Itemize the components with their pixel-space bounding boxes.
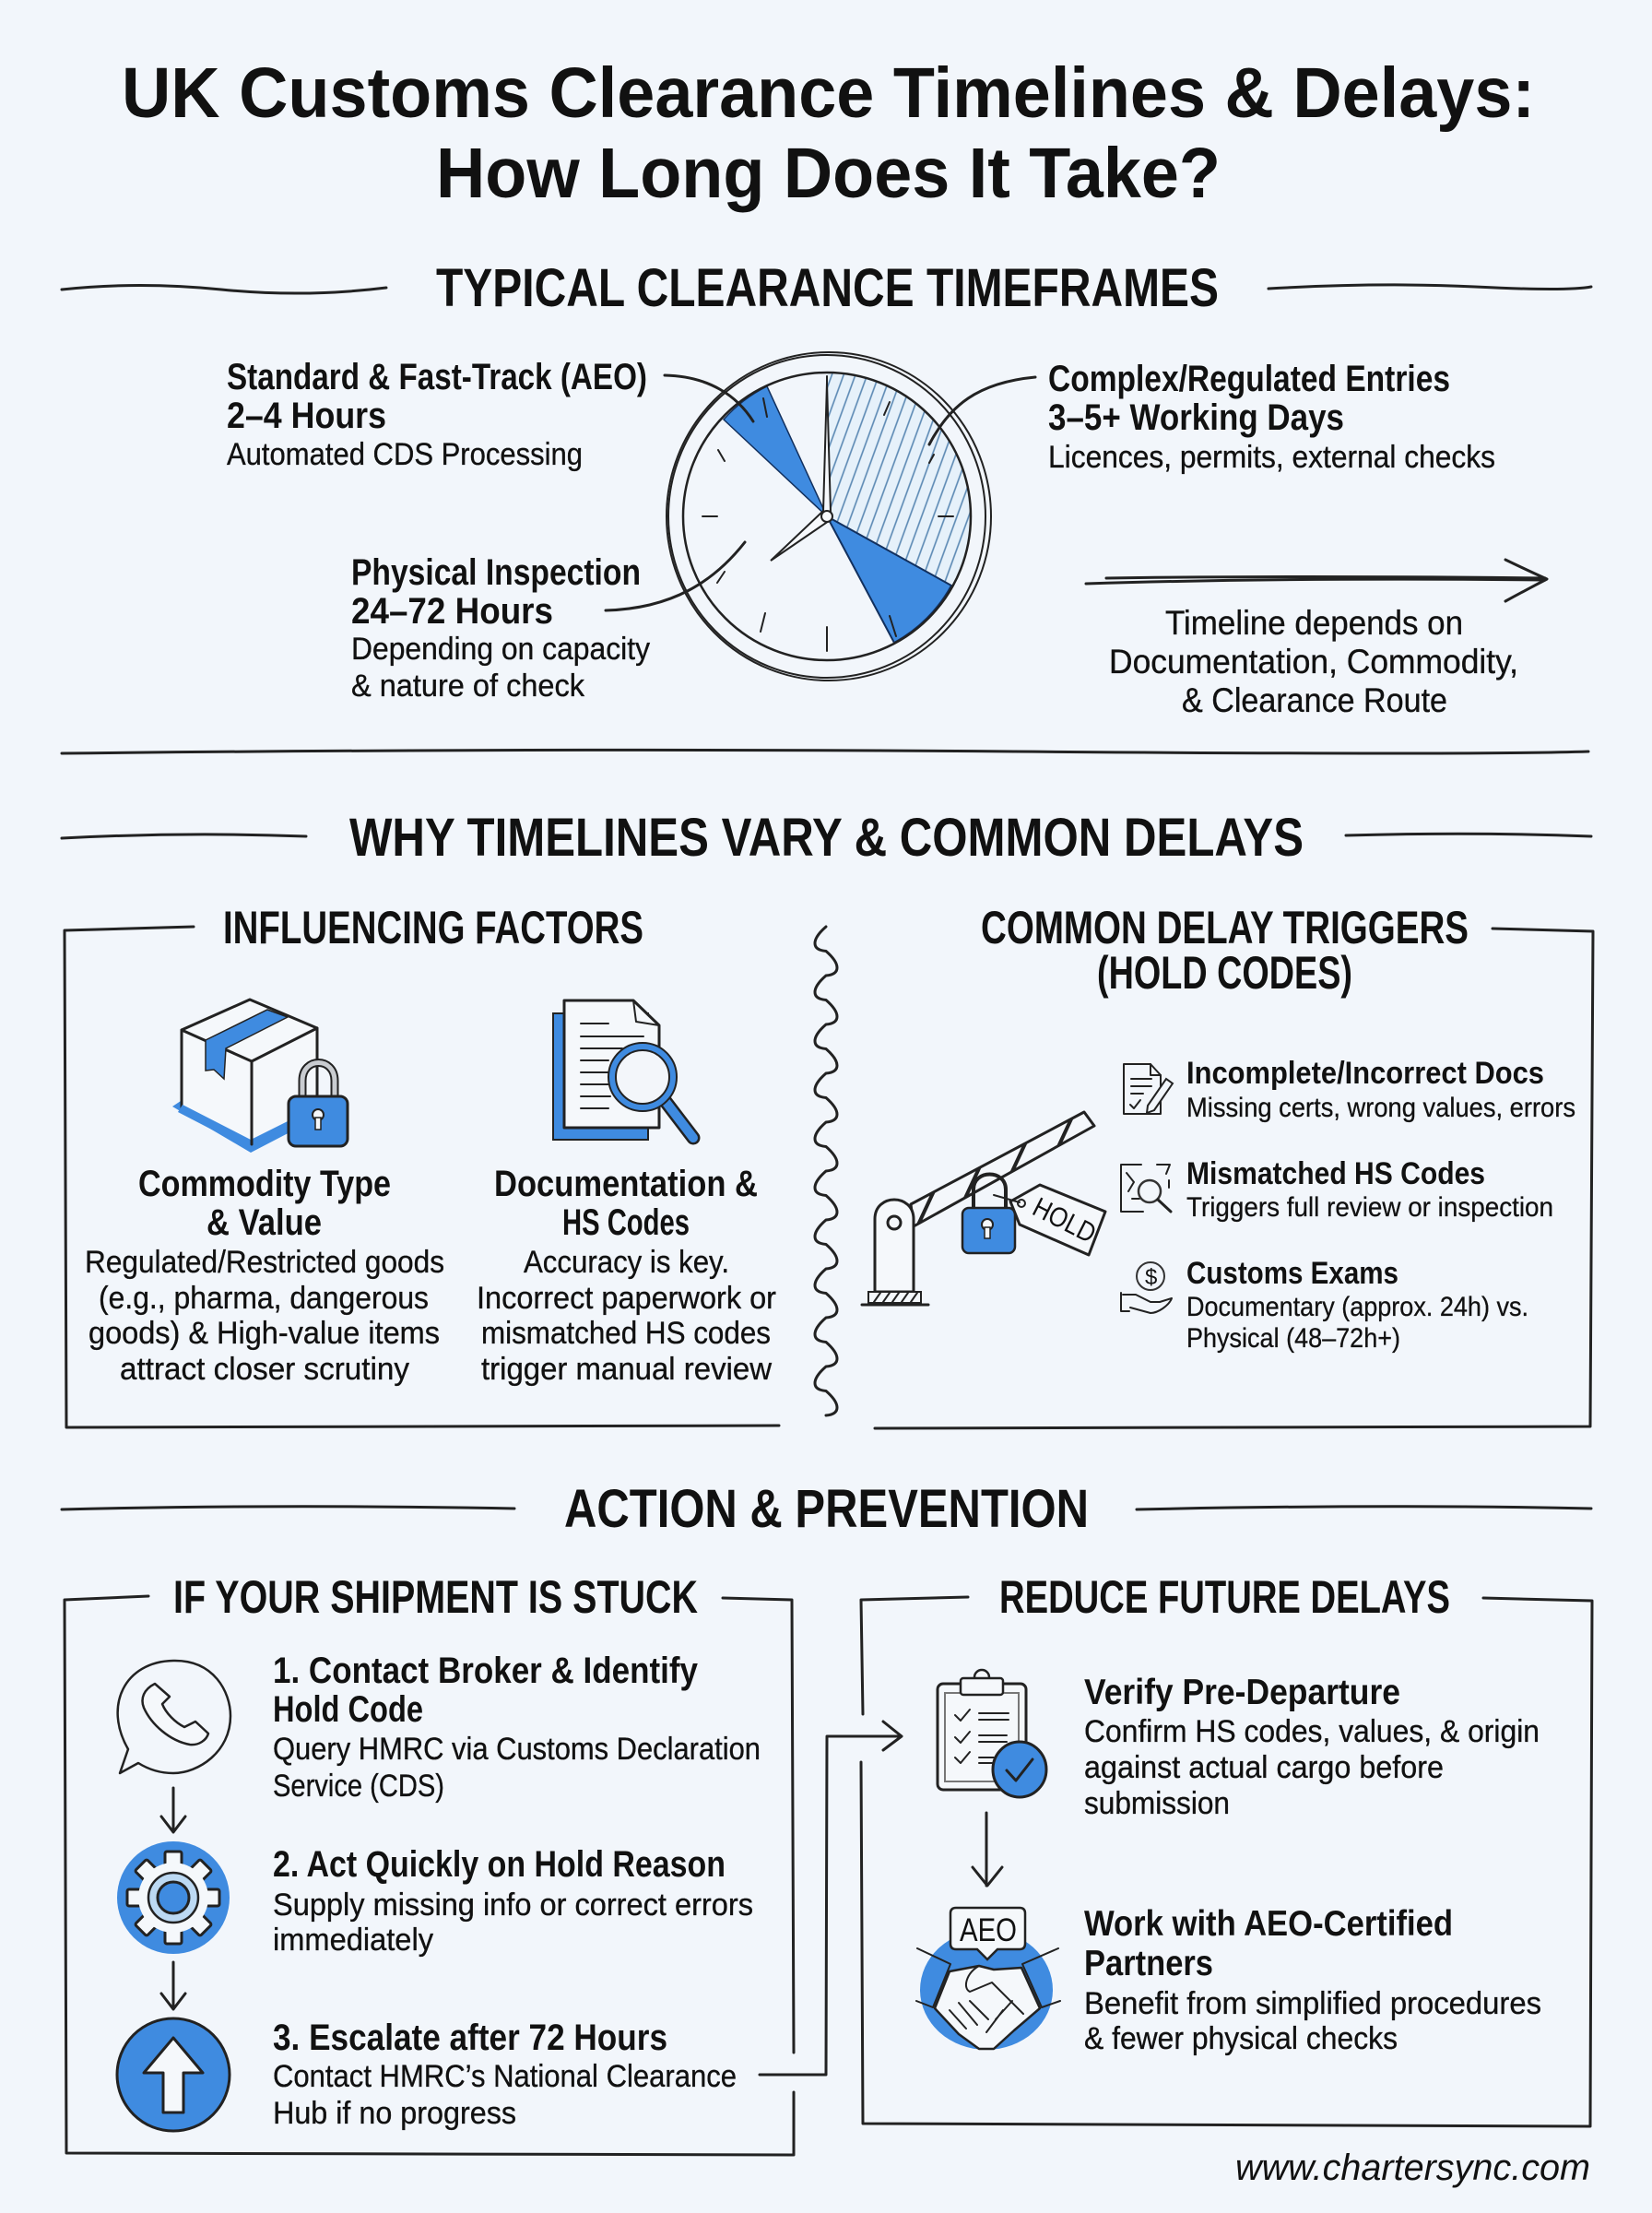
panel: common delay triggers [862,902,1593,1428]
icon: barrier with lock and hold tag [862,1112,1105,1305]
icon: hand and coin [1121,1262,1172,1313]
note: timeline depends: Timeline depends on [1165,604,1463,642]
icon: phone bubble [118,1661,230,1773]
trigger: incomplete docs: Incomplete/Incorrect Docs [1186,1056,1544,1091]
icon: clipboard with check [938,1670,1046,1797]
footer: website: www.chartersync.com [1235,2148,1590,2188]
factor: documentation: Accuracy is key. [524,1245,729,1280]
panel: influencing factors [65,902,779,1427]
trigger: mismatched codes [1121,1156,1553,1223]
heading: (HOLD CODES) [1097,947,1352,999]
callout: physical inspection [351,552,650,704]
heading [981,902,1469,999]
arrow: verify to partners [973,1813,1002,1886]
callout: complex [1048,359,1495,475]
icon: gear [117,1841,230,1954]
trigger: mismatched codes: Triggers full review or inspection [1186,1192,1553,1223]
heading: why timelines vary: WHY TIMELINES VARY & COMMON DELAYS [349,808,1304,868]
clock face [683,373,971,660]
step 3 [273,2018,737,2131]
heading: COMMON DELAY TRIGGERS [981,902,1469,953]
panel: reduce future delays [861,1571,1592,2126]
step 2: Supply missing info or correct errors [273,1888,753,1923]
trigger: customs exams: Physical (48–72h+) [1186,1323,1400,1354]
factor: documentation: Documentation & [494,1164,758,1204]
step 1: Service (CDS) [273,1769,444,1804]
item: verify pre-departure: against actual cargo before [1084,1750,1444,1785]
blue wedge: physical inspection [827,516,951,643]
step 3: Hub if no progress [273,2096,516,2131]
callout: complex: Complex/Regulated Entries [1048,359,1450,399]
factor: documentation: HS Codes [562,1202,690,1243]
clock ticks [702,376,953,651]
blue wedge: standard [724,386,827,516]
factor: commodity type: goods) & High-value items [88,1316,440,1351]
factor: commodity type: & Value [206,1202,322,1243]
callout: complex: 3–5+ Working Days [1048,397,1344,438]
step 3: 3. Escalate after 72 Hours [273,2018,667,2058]
heading: INFLUENCING FACTORS [223,902,643,953]
arrow: stuck to prevention [760,1722,902,2075]
factor: documentation: trigger manual review [481,1352,772,1387]
step 1: 1. Contact Broker & Identify [273,1651,699,1691]
note: timeline depends: Documentation, Commodity, [1109,643,1518,680]
step 1 [273,1651,761,1804]
heading: typical clearance timeframes: TYPICAL CLEARANCE TIMEFRAMES [436,258,1219,318]
item: AEO partners: Partners [1084,1944,1213,1983]
factor: commodity type: attract closer scrutiny [120,1352,409,1387]
trigger: customs exams [1121,1256,1528,1354]
callout: physical inspection: 24–72 Hours [351,591,553,632]
clock outer ring [667,352,991,680]
heading: IF YOUR SHIPMENT IS STUCK [173,1571,698,1623]
factor: documentation: Incorrect paperwork or [477,1281,776,1316]
trigger: incomplete docs: Missing certs, wrong values, errors [1186,1093,1575,1123]
callout: physical inspection: & nature of check [351,669,585,704]
callout: complex: Licences, permits, external checks [1048,440,1495,475]
callout: physical inspection: Depending on capacity [351,632,650,667]
trigger: incomplete docs [1124,1056,1575,1123]
factor: commodity type: (e.g., pharma, dangerous [99,1281,429,1316]
item: AEO partners: & fewer physical checks [1084,2021,1398,2056]
icon: form and pencil [1124,1064,1173,1114]
callout: standard [227,357,647,472]
callout: standard: Automated CDS Processing [227,437,583,472]
icon: magnifier over codes [1121,1165,1171,1212]
icon: barrier with lock and hold tag: HOLD [1028,1192,1101,1249]
hatched wedge: complex entries [827,372,970,586]
item: verify pre-departure [1084,1673,1540,1821]
callout: standard: Standard & Fast-Track (AEO) [227,357,647,397]
icon: AEO handshake [916,1908,1060,2050]
icon: escalate arrow [117,2018,230,2131]
item: AEO partners: Work with AEO-Certified [1084,1904,1453,1944]
step 3: Contact HMRC’s National Clearance [273,2059,737,2094]
factor: commodity type: Commodity Type [138,1164,391,1204]
trigger: mismatched codes: Mismatched HS Codes [1186,1156,1485,1191]
title [122,53,1535,213]
icon: box with lock [172,1000,348,1153]
title: UK Customs Clearance Timelines & Delays: [122,53,1535,133]
item: verify pre-departure: Confirm HS codes, values, & origin [1084,1714,1540,1749]
note: timeline depends: & Clearance Route [1182,681,1447,719]
arrow: step 1 to 2 [161,1788,185,1832]
clock hands [823,383,831,512]
icon: hand and coin: $ [1145,1265,1157,1290]
note: timeline depends [1109,604,1518,719]
callout: standard: 2–4 Hours [227,396,386,436]
arrow: step 2 to 3 [161,1962,185,2009]
item: AEO partners: Benefit from simplified procedures [1084,1986,1541,2021]
divider: squiggle [815,927,837,1415]
factor: documentation: mismatched HS codes [481,1316,771,1351]
leader lines [606,375,1035,610]
step 2: 2. Act Quickly on Hold Reason [273,1844,726,1885]
factor: commodity type [85,1164,444,1387]
panel: if your shipment is stuck [65,1571,794,2155]
step 2 [273,1844,753,1958]
heading: REDUCE FUTURE DELAYS [999,1571,1450,1623]
trigger: customs exams: Documentary (approx. 24h) vs. [1186,1292,1528,1322]
factor: documentation [477,1164,776,1387]
title: How Long Does It Take? [436,134,1221,213]
arrow: timeline [1086,560,1547,601]
step 1: Query HMRC via Customs Declaration [273,1732,761,1767]
item: AEO partners [1084,1904,1541,2056]
factor: commodity type: Regulated/Restricted goods [85,1245,444,1280]
icon: AEO handshake: AEO [960,1912,1017,1948]
step 1: Hold Code [273,1689,423,1730]
step 2: immediately [273,1923,433,1958]
callout: physical inspection: Physical Inspection [351,552,641,593]
icon: document with magnifier [553,1000,693,1140]
heading: action and prevention: ACTION & PREVENTION [564,1479,1089,1539]
chart: clock timeframes [667,352,991,680]
item: verify pre-departure: Verify Pre-Departure [1084,1673,1400,1712]
trigger: customs exams: Customs Exams [1186,1256,1398,1291]
item: verify pre-departure: submission [1084,1786,1230,1821]
